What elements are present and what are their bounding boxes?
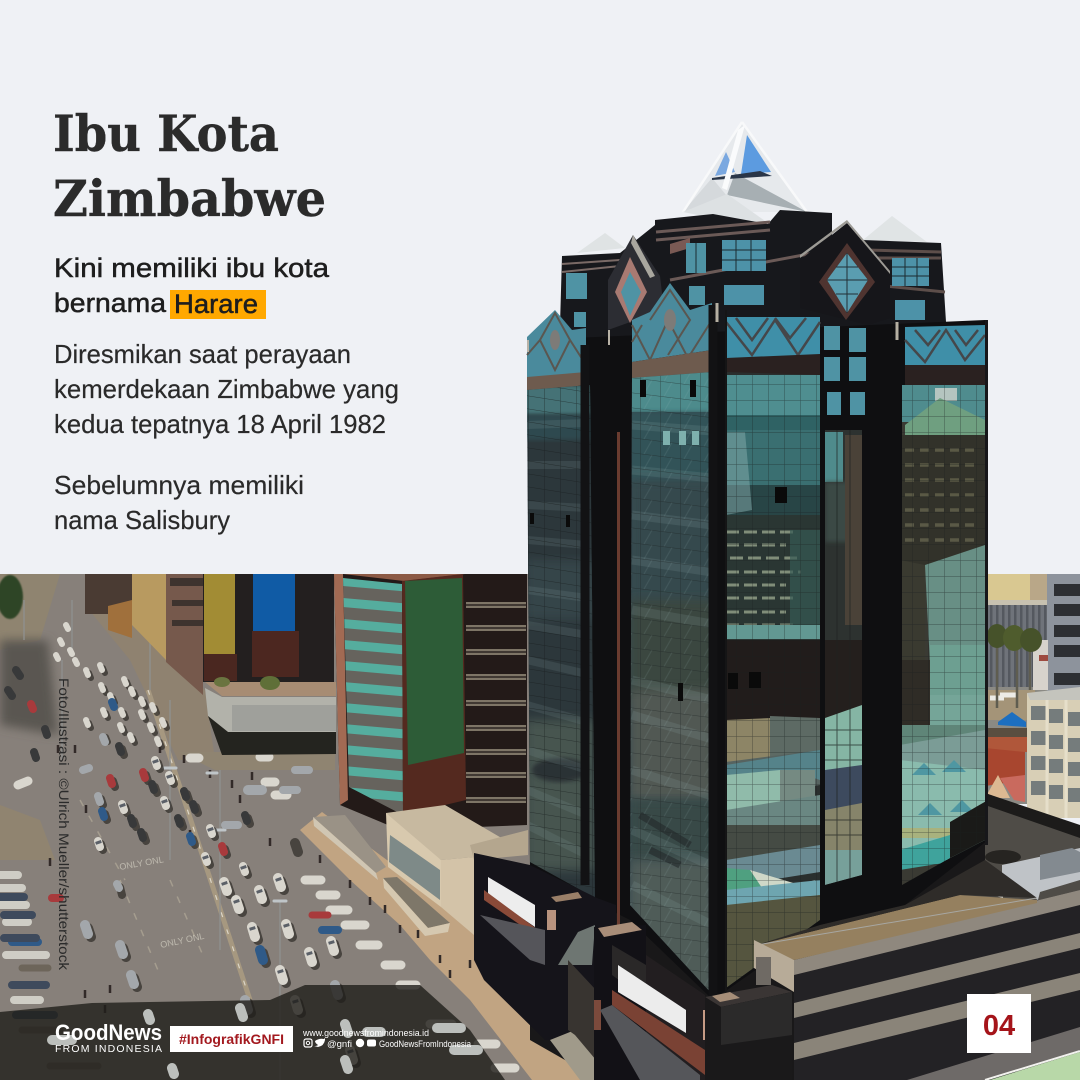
paragraph: previous name: nama Salisbury <box>54 505 230 535</box>
lamp posts <box>24 600 280 1080</box>
tower: crown turrets <box>527 210 985 380</box>
title line 2: Zimbabwe <box>53 169 326 228</box>
title line 1: Ibu Kota <box>53 104 279 163</box>
photo: background buildings <box>85 574 528 936</box>
dark base under tower and podium <box>530 793 1080 1080</box>
paragraph: inauguration: Diresmikan saat perayaan <box>54 339 351 369</box>
podium: striped building <box>794 890 1080 1080</box>
tower: column trims <box>528 303 897 1000</box>
paragraph: inauguration <box>54 339 399 439</box>
road markings: ONLY ONL <box>119 854 164 872</box>
dark roof terrace and machinery <box>950 793 1080 915</box>
paragraph: previous name <box>54 470 304 535</box>
low beige building and canopies <box>313 815 386 873</box>
parked and moving cars <box>0 625 515 1068</box>
page number badge <box>967 994 1031 1053</box>
podium: entrance blocks <box>474 853 792 1080</box>
logo: GoodNews from Indonesia <box>55 1020 162 1055</box>
tower: centre-right face <box>724 317 822 990</box>
tower: gables <box>608 220 890 330</box>
paragraph: inauguration: kedua tepatnya 18 April 1982 <box>54 409 386 439</box>
left turret <box>562 260 620 272</box>
paragraph: inauguration: kemerdekaan Zimbabwe yang <box>54 374 399 404</box>
photo: street scene <box>0 574 610 1080</box>
website and social handles: @gnfi <box>327 1039 352 1050</box>
road markings <box>119 854 205 950</box>
website and social handles <box>302 1028 472 1050</box>
podium: roof terrace <box>754 860 1037 992</box>
cream building <box>1027 693 1080 818</box>
cars inside the shadow <box>52 1008 478 1074</box>
pyramid sky window <box>741 135 771 174</box>
subheading with highlight: Harare <box>174 289 258 319</box>
hashtag badge: #InfografikGNFI <box>179 1031 284 1047</box>
right turret <box>866 250 945 292</box>
blue tarp <box>998 712 1026 727</box>
tower: centre-left face <box>617 283 715 1000</box>
road markings: ONLY ONL <box>159 931 205 950</box>
tower: right wing <box>900 320 988 885</box>
low building with planted roof <box>205 682 336 696</box>
page number badge: 04 <box>983 1010 1015 1042</box>
subheading with highlight <box>54 253 329 319</box>
pedestrians <box>50 745 570 1048</box>
photo credit: Foto/Ilustrasi : ©Ulrich Mueller/shutterstock <box>56 678 72 971</box>
cast shadow at bottom of street <box>0 985 505 1080</box>
palm trees <box>997 640 1030 708</box>
website and social handles: www.goodnewsfromindonesia.id <box>302 1028 429 1039</box>
tower: left face <box>525 310 597 905</box>
photo: distant city on the right <box>985 574 1080 818</box>
green billboard tower <box>334 574 527 830</box>
logo: GoodNews from Indonesia: GoodNews <box>55 1020 162 1045</box>
website and social handles: GoodNewsFromIndonesia <box>379 1039 472 1050</box>
paragraph: previous name: Sebelumnya memiliki <box>54 470 304 500</box>
tower: dark core <box>527 320 988 1000</box>
tower: centre notch <box>824 326 866 890</box>
subheading with highlight: Kini memiliki ibu kota <box>54 253 329 283</box>
social icons <box>304 1038 376 1047</box>
subheading with highlight: bernama <box>54 288 166 318</box>
hashtag badge <box>170 1026 293 1052</box>
tower: roof pyramids <box>577 122 927 253</box>
logo: GoodNews from Indonesia: FROM INDONESIA <box>55 1043 162 1055</box>
